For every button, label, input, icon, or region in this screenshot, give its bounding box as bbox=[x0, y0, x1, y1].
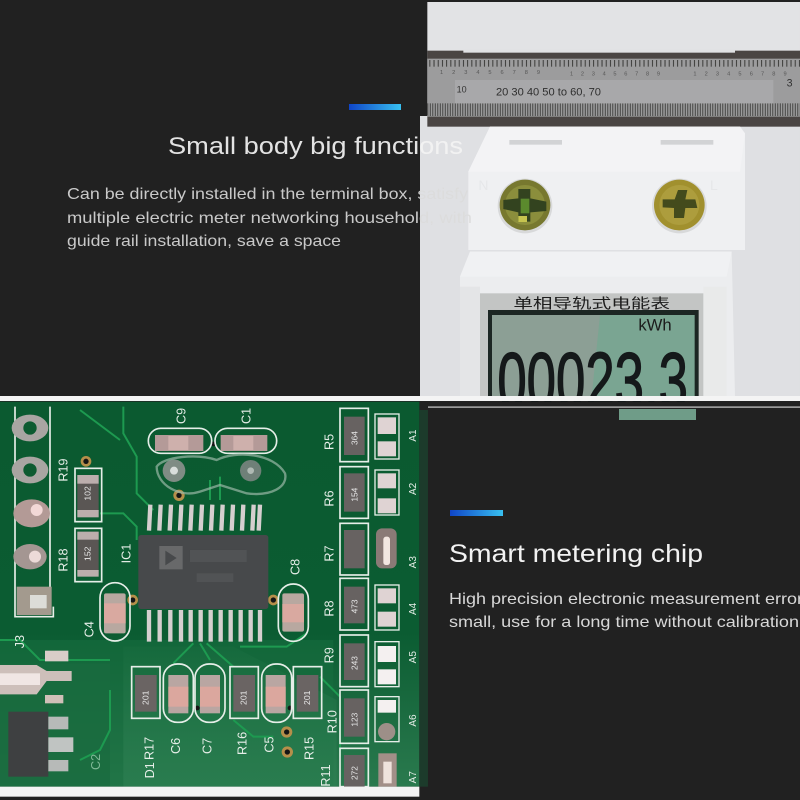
regulator bbox=[0, 651, 73, 777]
ruler: 1 2 3 4 5 6 7 8 9 bbox=[440, 70, 540, 76]
silkscreen labels: A1 bbox=[408, 429, 419, 442]
accent bar bbox=[450, 510, 503, 516]
silkscreen labels: R11 bbox=[319, 764, 333, 787]
silkscreen labels: R5 bbox=[322, 434, 336, 450]
white bottom band bbox=[0, 787, 419, 797]
silkscreen labels: C4 bbox=[82, 621, 96, 637]
LCD display bbox=[480, 293, 703, 425]
silkscreen labels: A3 bbox=[408, 556, 419, 568]
lower component row bbox=[132, 664, 322, 722]
description: High precision electronic measurement error bbox=[449, 591, 800, 608]
ruler: 3 bbox=[787, 78, 793, 90]
description bbox=[67, 186, 472, 250]
meter body bbox=[460, 127, 745, 397]
description: Can be directly installed in the terminal box, satisfy bbox=[67, 186, 468, 203]
heading: Small body big functions bbox=[168, 133, 463, 160]
silkscreen labels: R8 bbox=[322, 600, 336, 617]
description: multiple electric meter networking household, with bbox=[67, 210, 472, 227]
accent bar bbox=[349, 104, 401, 110]
right pads A1-A7 bbox=[375, 414, 399, 787]
silkscreen labels: R10 bbox=[326, 710, 340, 733]
right resistor column R5-R11: 473 bbox=[349, 599, 359, 613]
LCD display: 单相导轨式电能表 bbox=[513, 295, 670, 311]
description bbox=[449, 591, 800, 631]
meter body: N bbox=[478, 177, 488, 193]
photo background bbox=[427, 2, 800, 117]
silkscreen labels: C9 bbox=[175, 408, 189, 424]
description: guide rail installation, save a space bbox=[67, 233, 341, 250]
silkscreen labels: R15 bbox=[302, 737, 316, 760]
silkscreen labels: A2 bbox=[408, 482, 419, 495]
silkscreen labels: J3 bbox=[13, 635, 27, 648]
resistors R18 R19: 102 bbox=[83, 486, 93, 501]
meter body: L bbox=[710, 177, 718, 193]
silkscreen labels: R19 bbox=[57, 458, 71, 482]
top capacitors C9 C1 bbox=[148, 428, 285, 494]
resistors R18 R19: 152 bbox=[83, 546, 93, 561]
ruler bbox=[427, 49, 800, 127]
silkscreen labels: A6 bbox=[408, 714, 419, 727]
silkscreen labels: R7 bbox=[322, 545, 336, 562]
right resistor column R5-R11: 364 bbox=[349, 431, 359, 445]
ruler: 1 2 3 4 5 6 7 8 9 bbox=[693, 71, 787, 77]
capacitors C4 C8 bbox=[100, 583, 308, 641]
ruler: 1 2 3 4 5 6 7 8 9 bbox=[570, 71, 660, 77]
resistors R18 R19 bbox=[75, 468, 102, 582]
silkscreen labels: C7 bbox=[201, 738, 215, 754]
lower component row: 201 bbox=[140, 690, 150, 705]
right resistor column R5-R11: 243 bbox=[349, 656, 359, 670]
silkscreen labels: C2 bbox=[89, 754, 103, 770]
silkscreen labels: C1 bbox=[240, 408, 254, 424]
silkscreen labels: R9 bbox=[322, 647, 336, 663]
panel: smart metering chip text block bbox=[449, 510, 800, 631]
description: small, use for a long time without calibration bbox=[449, 614, 799, 631]
left dark patch above body bbox=[0, 0, 420, 398]
LCD display: 00023.3 bbox=[497, 336, 688, 425]
ruler: 20 30 40 50 to 60, 70 bbox=[496, 86, 601, 98]
silkscreen labels: C5 bbox=[262, 736, 276, 753]
lower component row: 201 bbox=[302, 690, 312, 705]
panel: small body text block bbox=[67, 104, 472, 250]
connector pads J3 bbox=[12, 407, 53, 617]
panel: meter photo with ruler bbox=[420, 2, 800, 425]
silkscreen labels: R16 bbox=[236, 732, 250, 755]
silkscreen labels: A7 bbox=[408, 771, 419, 783]
lower component row: 201 bbox=[239, 690, 249, 705]
right resistor column R5-R11: 154 bbox=[349, 487, 359, 502]
panel: PCB photo bbox=[0, 402, 428, 797]
icon: right screw bbox=[652, 179, 707, 233]
LCD display: kWh bbox=[638, 316, 672, 335]
vias bbox=[81, 456, 293, 758]
heading: Smart metering chip bbox=[449, 540, 703, 568]
ruler: 10 bbox=[457, 85, 467, 95]
silkscreen labels: D1 bbox=[143, 762, 157, 778]
silkscreen labels: R18 bbox=[57, 548, 71, 572]
silkscreen labels bbox=[13, 408, 419, 787]
silkscreen labels: A5 bbox=[408, 651, 419, 663]
silkscreen labels: R17 bbox=[142, 737, 156, 760]
silkscreen labels: R6 bbox=[322, 490, 336, 507]
right resistor column R5-R11: 123 bbox=[349, 712, 359, 727]
right resistor column R5-R11: 272 bbox=[349, 766, 359, 780]
right resistor column R5-R11 bbox=[340, 408, 368, 787]
silkscreen labels: A4 bbox=[408, 602, 419, 615]
silkscreen labels: IC1 bbox=[120, 544, 134, 563]
icon: left screw bbox=[498, 179, 552, 233]
divider band with green patch bbox=[0, 396, 800, 800]
silkscreen labels: C8 bbox=[288, 559, 302, 575]
silkscreen labels: C6 bbox=[169, 738, 183, 754]
chip IC1 bbox=[138, 505, 268, 642]
copper regions bbox=[0, 407, 340, 787]
